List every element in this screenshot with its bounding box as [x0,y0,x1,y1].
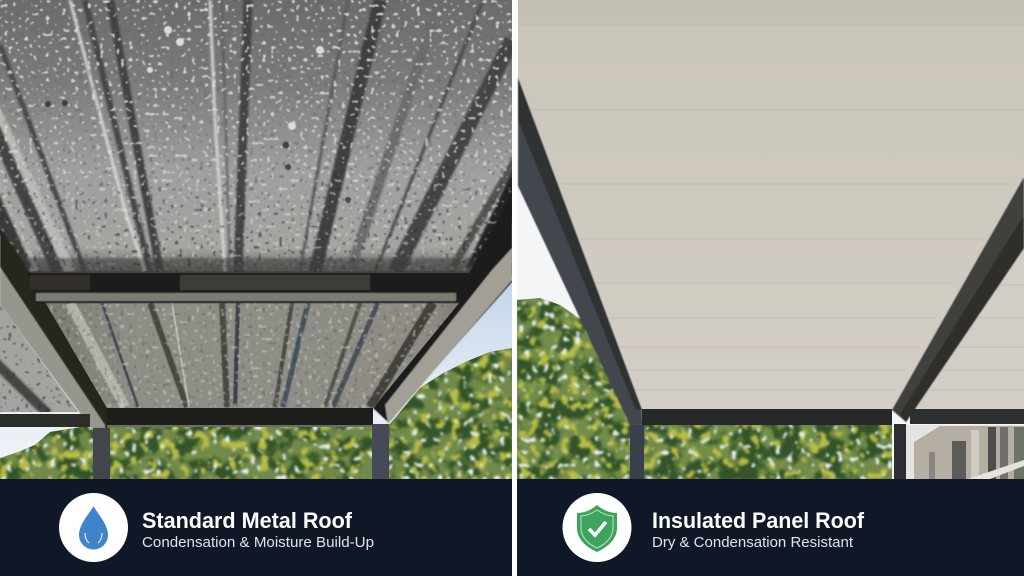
icon: water drop in white circle [59,493,128,562]
corrugated metal roof with condensation, upper bay [0,0,512,275]
dark beam flank [0,228,108,428]
condensation droplets [0,22,512,272]
right diagonal beam [373,193,512,424]
left roof wedge [0,305,78,412]
subheading: condensation and moisture: Condensation & Moisture Build-Up [142,535,374,551]
sky background right [517,160,1024,480]
heading: insulated panel roof: Insulated Panel Roof [652,508,865,533]
roof ribs upper [0,0,530,272]
subheading: dry and condensation resistant: Dry & Condensation Resistant [652,535,853,551]
panel: insulated panel roof photo [517,0,1024,480]
panel: standard metal roof photo [0,0,530,480]
heading: standard metal roof: Standard Metal Roof [142,508,353,533]
cross beam upper [28,272,482,303]
left diagonal beam [0,228,108,428]
support posts right [630,424,906,479]
tree foliage right [517,290,897,480]
sky background left [0,270,512,458]
roof ribs lower [70,303,433,407]
dark large droplets [45,100,351,203]
tree foliage left [0,340,512,480]
light beam face [0,267,105,428]
caption bar: insulated panel roof [517,479,1024,576]
icon: green shield with check in white circle [562,493,632,562]
right steel beam [892,177,1024,422]
support posts [93,424,389,479]
building in background [906,425,1024,479]
panel seams [518,25,1024,390]
lower cross beam [0,408,373,427]
caption bar: standard metal roof [0,479,512,576]
corrugated metal roof, lower bay [46,302,460,408]
dark beam flank [373,193,512,422]
shaded strip above beam [26,256,476,272]
left steel beam [518,78,642,425]
light beam face [385,248,512,424]
lower cross beam right [642,409,1024,425]
large droplets [147,26,324,130]
insulated ceiling panels [518,0,1024,410]
